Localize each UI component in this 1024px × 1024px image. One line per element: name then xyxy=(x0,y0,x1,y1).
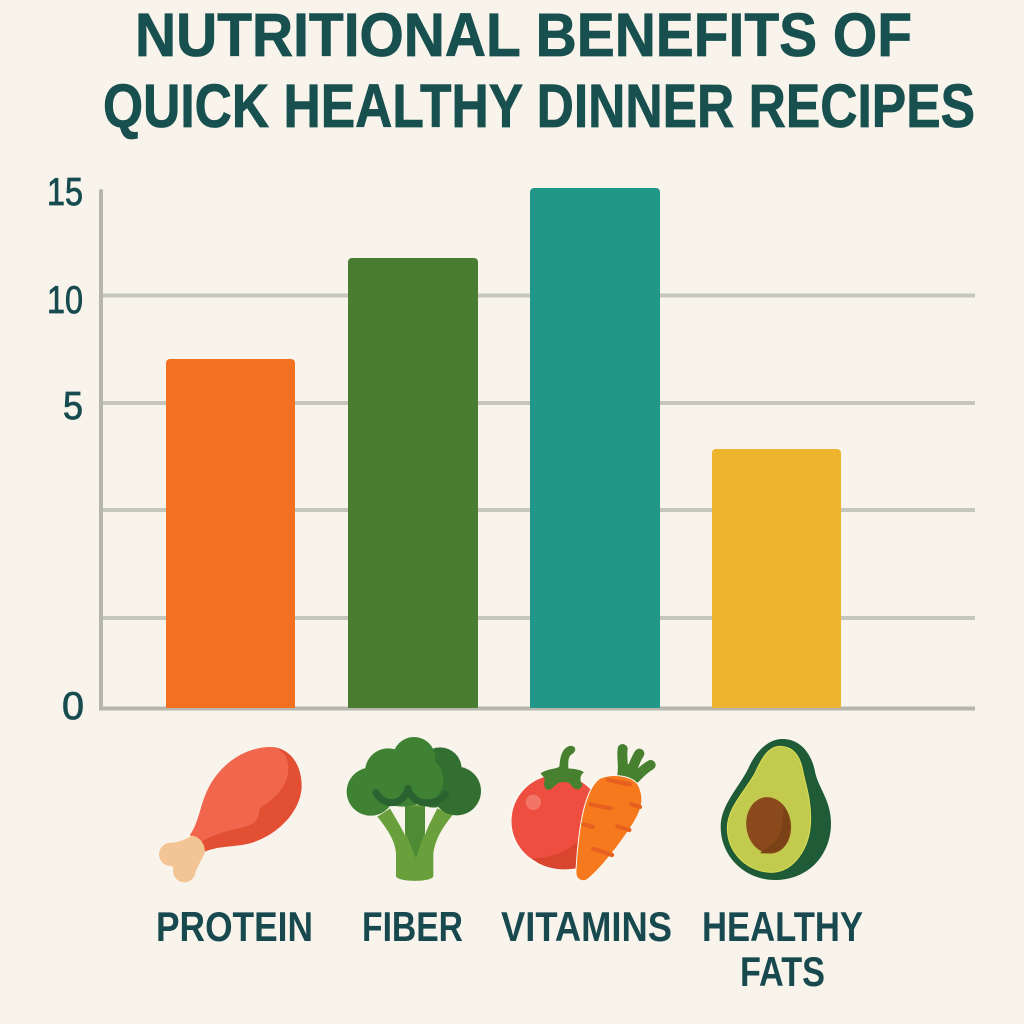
label: protein: PROTEIN xyxy=(156,903,313,950)
title xyxy=(103,1,975,140)
category labels xyxy=(156,903,863,995)
bar: vitamins xyxy=(530,188,660,708)
icon: tomato and carrot xyxy=(511,746,651,881)
carrot xyxy=(622,749,651,778)
label: healthy fats: HEALTHY xyxy=(702,903,863,950)
label: healthy fats xyxy=(702,903,863,995)
tomato xyxy=(511,774,604,868)
bar: fiber xyxy=(348,258,478,708)
y axis labels xyxy=(47,171,84,728)
icon: broccoli xyxy=(347,737,481,881)
title: NUTRITIONAL BENEFITS OF xyxy=(135,1,912,69)
bar chart xyxy=(99,188,975,710)
label: healthy fats: FATS xyxy=(740,948,825,995)
y axis labels: 0 xyxy=(62,685,84,728)
axes xyxy=(99,189,975,710)
bar: healthy fats xyxy=(712,449,841,708)
y axis labels: 5 xyxy=(63,385,83,428)
label: fiber: FIBER xyxy=(362,903,463,950)
icon: chicken drumstick xyxy=(159,747,302,882)
bar: protein xyxy=(166,359,295,708)
icon: avocado xyxy=(721,739,831,880)
y axis labels: 10 xyxy=(47,279,83,322)
label: vitamins: VITAMINS xyxy=(501,903,672,950)
y axis labels: 15 xyxy=(47,171,83,214)
